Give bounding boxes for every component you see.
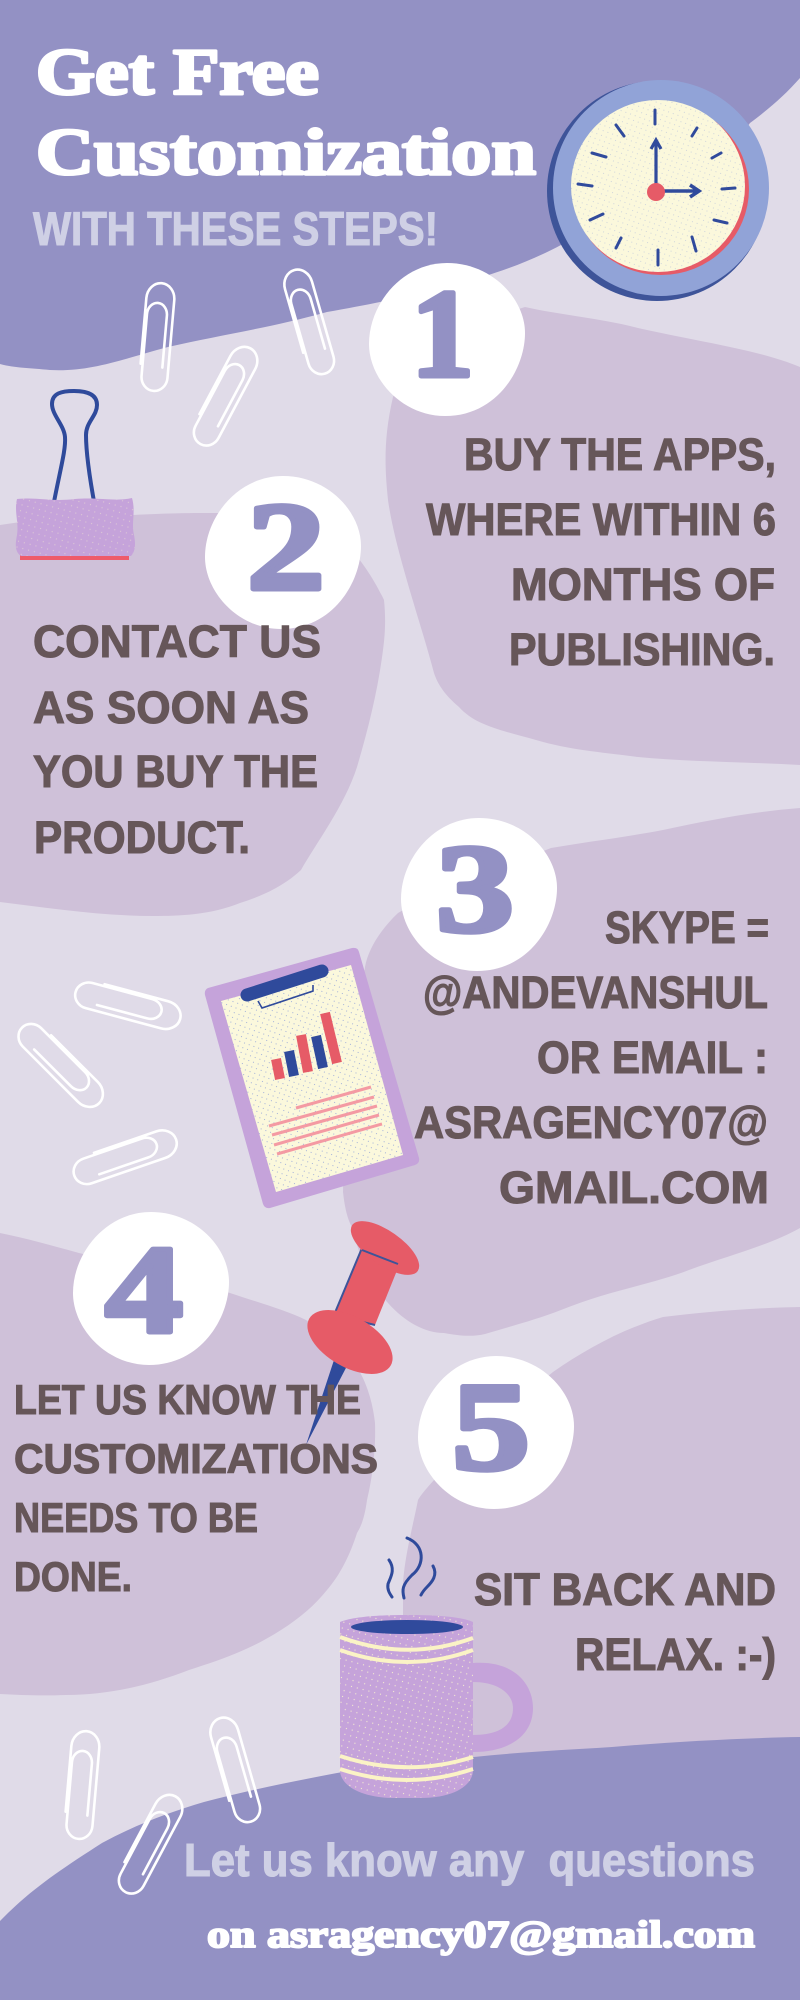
text: step 2: CONTACT US	[33, 616, 321, 667]
text: step 2: AS SOON AS	[33, 682, 309, 733]
text: step 3	[414, 902, 769, 1213]
badge: step 3: 3	[436, 820, 514, 959]
text: step 1	[426, 429, 776, 675]
text: step 3: ASRAGENCY07@	[414, 1097, 768, 1148]
text: step 3: OR EMAIL :	[537, 1032, 768, 1083]
text: step 4: DONE.	[14, 1553, 132, 1600]
text: step 1: BUY THE APPS,	[464, 429, 776, 480]
text: step 5: SIT BACK AND	[474, 1564, 776, 1615]
icon: wall clock	[547, 80, 769, 301]
badge: step 2: 2	[247, 478, 325, 617]
panel: step 4 background	[0, 1233, 375, 1695]
icon: paperclip bottom 3	[207, 1714, 263, 1826]
text: step 2: YOU BUY THE	[33, 746, 318, 797]
text: step 4: CUSTOMIZATIONS	[14, 1435, 378, 1482]
badge: step 4: 4	[105, 1221, 183, 1360]
badge: step 5	[418, 1356, 574, 1509]
icon: coffee mug	[340, 1615, 533, 1798]
badge: step 4	[73, 1212, 229, 1365]
bar chart	[276, 1013, 337, 1079]
icon: paperclip bottom 1	[63, 1730, 101, 1840]
panel: step 1 background	[386, 307, 800, 765]
text: step 4	[14, 1376, 378, 1600]
badge: step 1: 1	[411, 265, 474, 404]
badge: step 2	[205, 476, 361, 629]
text: step 3: SKYPE =	[605, 902, 769, 953]
panel: step 2 background	[0, 513, 385, 916]
text: step 3: GMAIL.COM	[499, 1162, 769, 1213]
footer question line: Let us know any questions	[184, 1834, 755, 1886]
icon: paperclip middle 2	[13, 1017, 109, 1113]
text: step 4: NEEDS TO BE	[14, 1494, 258, 1541]
text lines on clipboard	[269, 1087, 382, 1154]
icon: paperclip bottom 2	[112, 1790, 188, 1898]
badge: step 3	[401, 818, 557, 971]
text: step 2: PRODUCT.	[34, 812, 250, 863]
text: step 5	[474, 1564, 776, 1680]
header wave	[0, 0, 800, 370]
text: step 4: LET US KNOW THE	[14, 1376, 361, 1423]
footer wave	[0, 1737, 800, 2000]
icon: paperclip top 3	[281, 266, 337, 378]
footer email line: on asragency07@gmail.com	[207, 1914, 755, 1956]
badge: step 5: 5	[452, 1358, 530, 1497]
text: step 1: MONTHS OF	[511, 559, 775, 610]
icon: binder clip	[16, 391, 135, 560]
panel: step 3 background	[343, 808, 800, 1336]
text: step 1: PUBLISHING.	[509, 624, 775, 675]
title	[33, 36, 536, 255]
footer text	[184, 1834, 755, 1956]
subtitle: WITH THESE STEPS!	[33, 202, 438, 255]
icon: paperclip middle 1	[72, 978, 184, 1032]
panel: step 5 background	[340, 1307, 800, 1790]
icon: steam	[388, 1538, 435, 1598]
icon: paperclip top 2	[187, 342, 263, 450]
text: step 5: RELAX. :-)	[575, 1629, 776, 1680]
icon: push pin	[297, 1211, 428, 1445]
icon: clipboard with chart	[205, 948, 419, 1208]
badge: step 1	[369, 263, 525, 416]
icon: paperclip middle 3	[69, 1126, 181, 1188]
icon: paperclip top 1	[138, 282, 176, 392]
text: step 2	[33, 616, 321, 863]
title line 2: Customization	[36, 116, 536, 189]
title line 1: Get Free	[36, 36, 319, 109]
text: step 1: WHERE WITHIN 6	[426, 494, 776, 545]
